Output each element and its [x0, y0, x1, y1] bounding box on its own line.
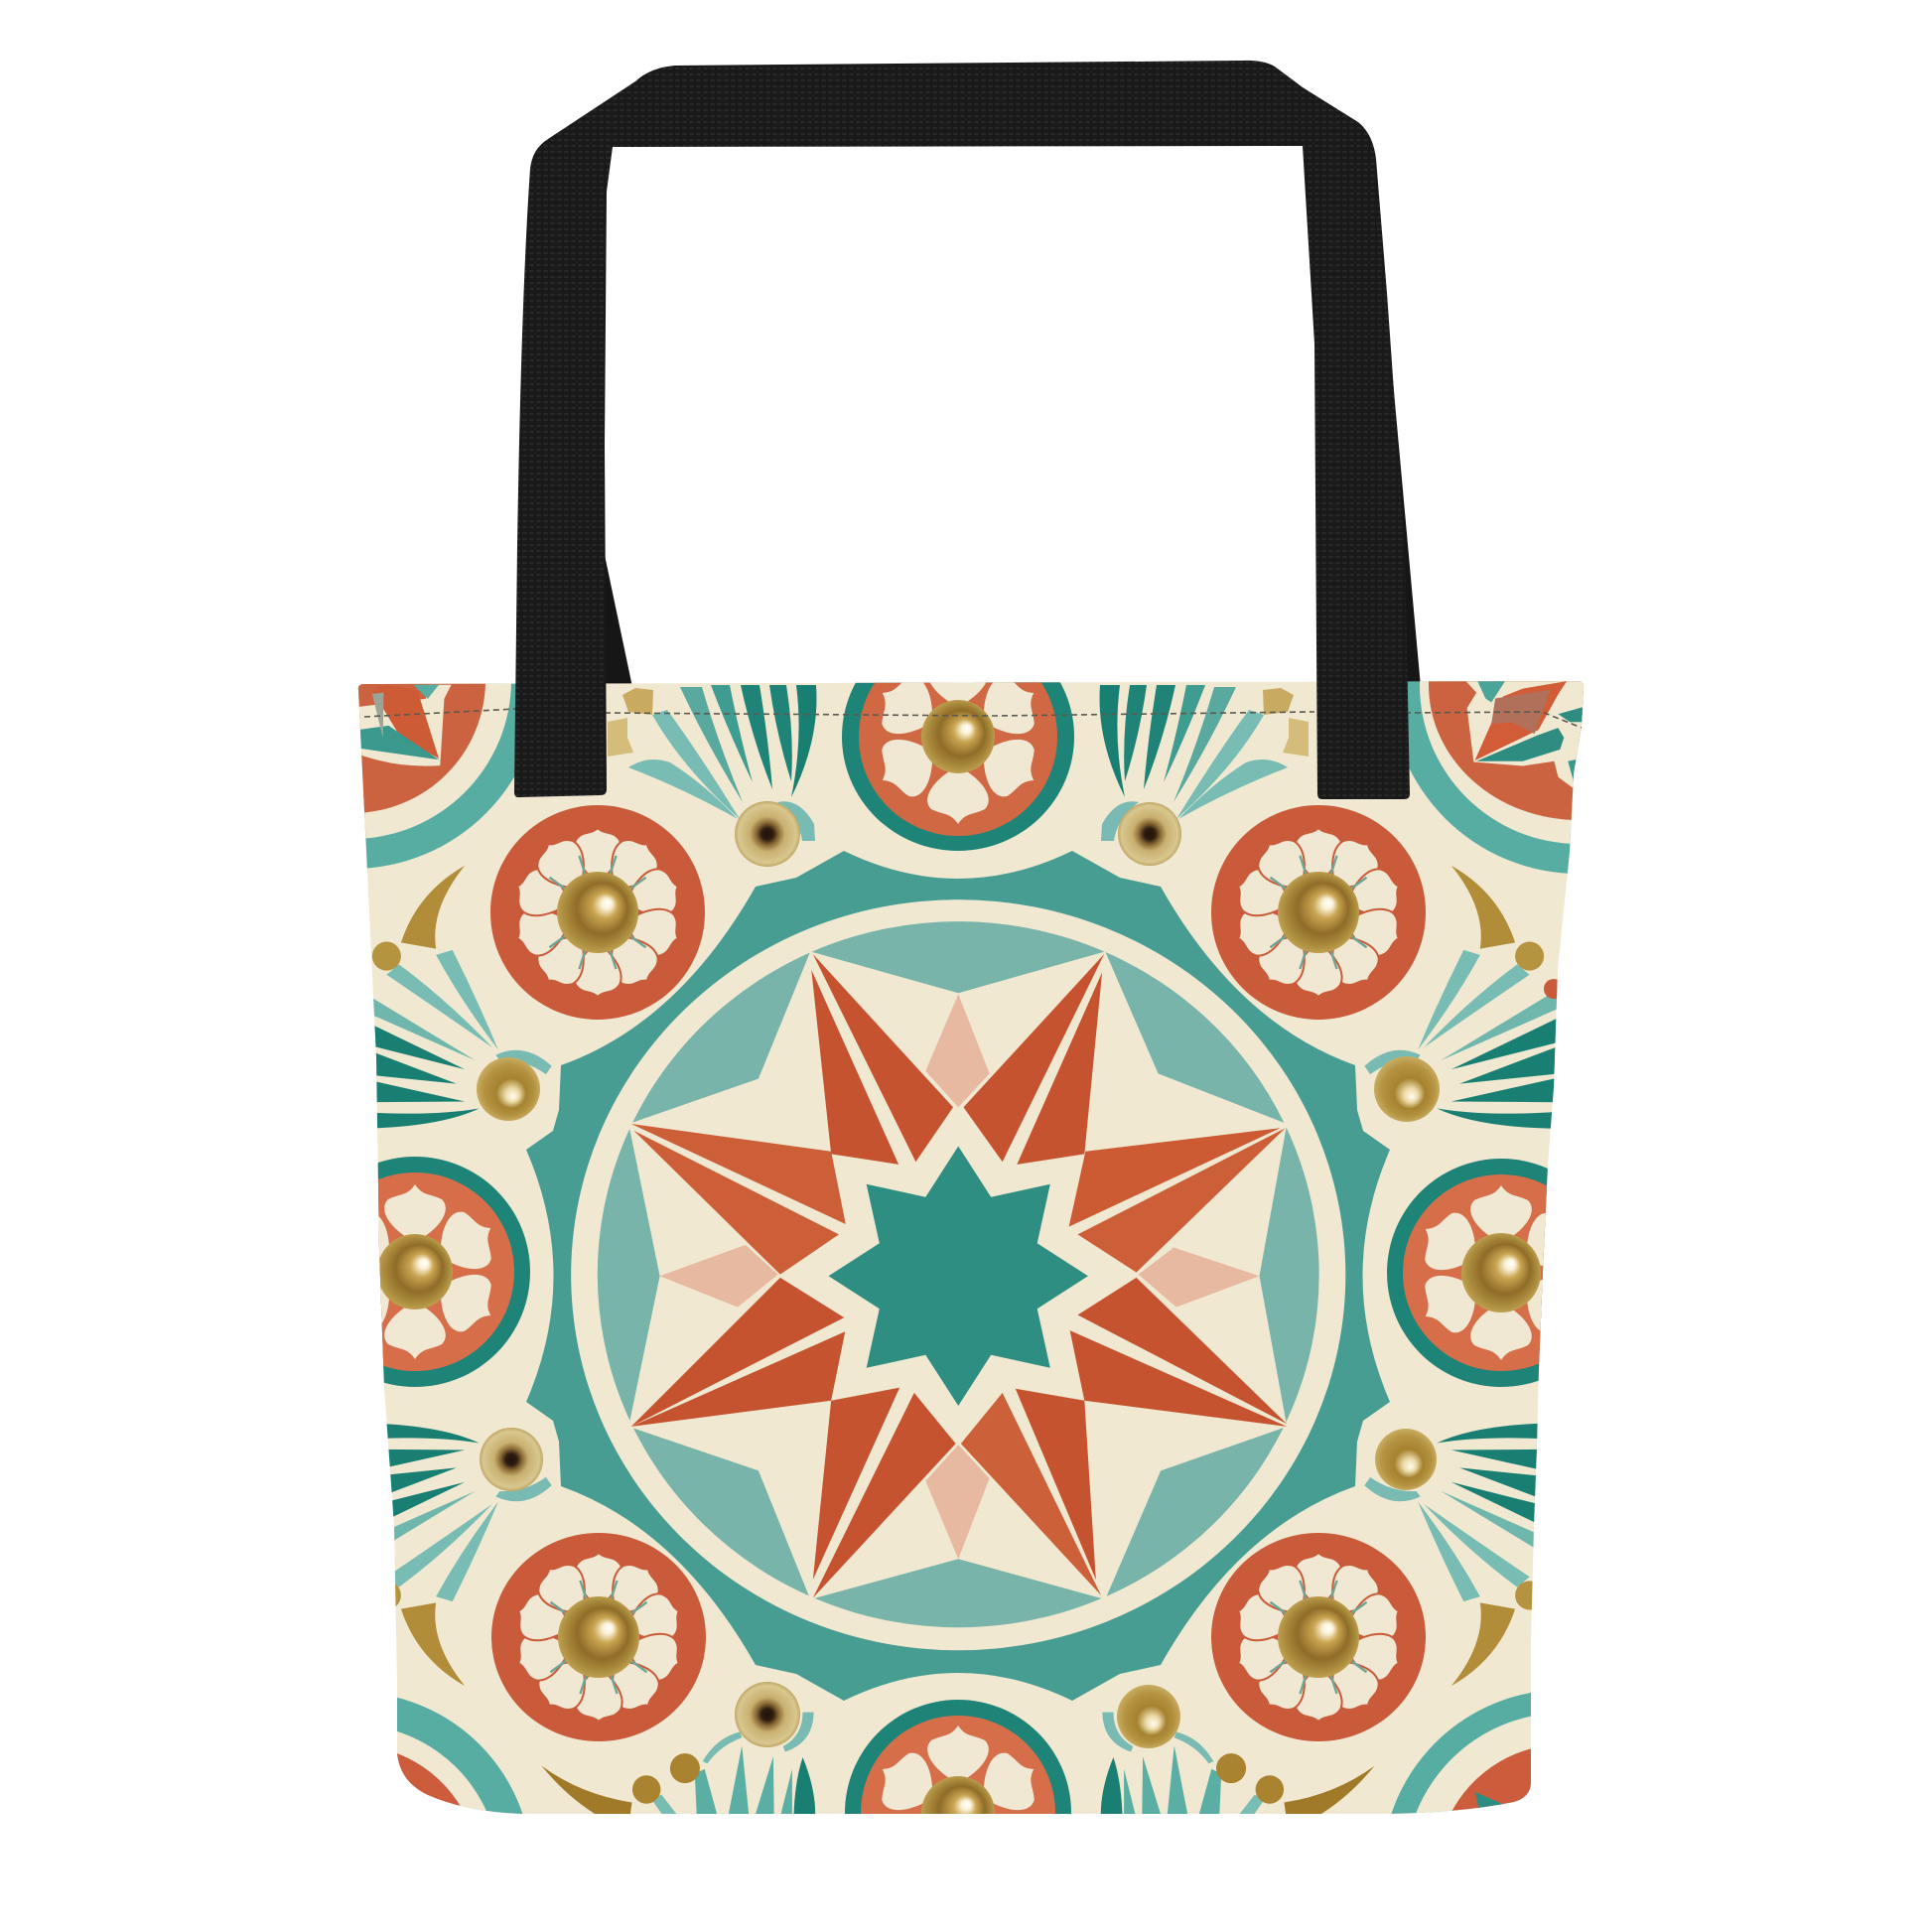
- corner medallion: top left: [357, 683, 516, 868]
- bag body: [357, 681, 1585, 1814]
- cream eight-point field: [628, 951, 1287, 1599]
- gold studs: [477, 801, 1440, 1748]
- front handle: [514, 61, 1410, 799]
- corner medallion: bottom right: [1392, 1693, 1531, 1814]
- flower circle: bottom left: [491, 1533, 706, 1741]
- tote bag illustration: [357, 60, 1585, 1814]
- flower circle: right: [1387, 1159, 1548, 1387]
- flower circle: top centre: [842, 682, 1074, 851]
- flower circle: bottom right: [1211, 1533, 1426, 1741]
- cream ring: [571, 899, 1345, 1650]
- top hem stitching: [364, 709, 1582, 728]
- fan motifs: [355, 685, 1564, 1816]
- flower circle: left: [377, 1157, 530, 1387]
- corner medallion: top right: [1408, 681, 1585, 874]
- flower circle: top left: [490, 805, 705, 1020]
- corner medallion: bottom left: [397, 1698, 522, 1814]
- flower circle: bottom centre: [845, 1700, 1071, 1814]
- teal scalloped band: [526, 851, 1390, 1701]
- teal centre star: [829, 1147, 1088, 1406]
- peach diamonds: [660, 994, 1260, 1559]
- light teal disc: [598, 921, 1319, 1627]
- red star shards: [631, 954, 1287, 1597]
- flower circle: top right: [1211, 805, 1426, 1020]
- back straps: [596, 293, 1421, 687]
- central star medallion: [571, 899, 1345, 1650]
